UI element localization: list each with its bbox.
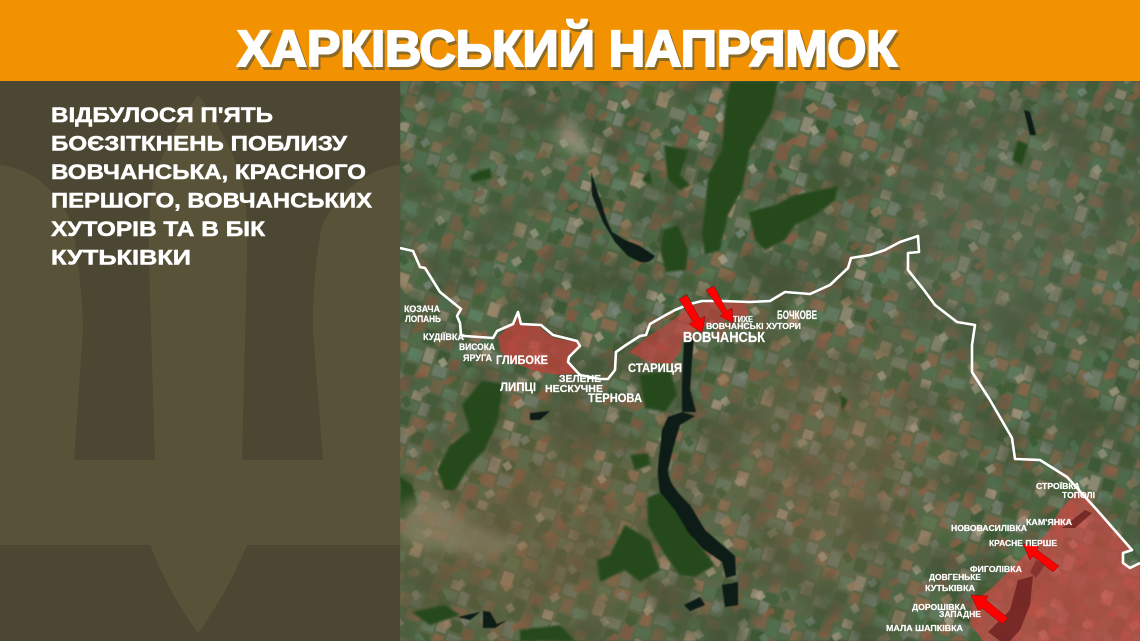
map labels: МАЛА ШАПКІВКА: [886, 623, 963, 633]
text block: summary: ВІДБУЛОСЯ П'ЯТЬ: [51, 103, 273, 127]
map labels: ЗЕЛЕНЕ: [559, 373, 601, 385]
map labels: ТЕРНОВА: [588, 393, 642, 405]
map labels: ЛОПАНЬ: [405, 314, 441, 324]
map labels: ВОВЧАНСЬКІ ХУТОРИ: [706, 321, 801, 331]
map labels: ТИХЕ: [733, 314, 753, 324]
map labels: [404, 304, 1095, 633]
forests: [400, 81, 1028, 641]
text block: summary: ВОВЧАНСЬКА, КРАСНОГО: [51, 160, 366, 184]
satellite map: [390, 81, 1140, 641]
map labels: КУДІЇВКА: [423, 332, 464, 342]
rivers and reservoirs: [458, 110, 1036, 628]
map labels: ЗАПАДНЕ: [939, 609, 981, 619]
tonal variation: [390, 100, 1120, 640]
map labels: ДОРОШІВКА: [912, 602, 966, 612]
text block: summary: ХУТОРІВ ТА В БІК: [51, 217, 266, 241]
occupied zone: south-east: [970, 490, 1140, 641]
icon: trident watermark: [0, 95, 400, 633]
occupied zone: Hlyboke: [498, 313, 580, 375]
map labels: ЛИПЦІ: [500, 382, 536, 394]
panel: left text panel with trident: [0, 81, 400, 641]
map labels: КРАСНЕ ПЕРШЕ: [989, 538, 1057, 548]
map labels: ТОПОЛІ: [1062, 490, 1095, 500]
title: ХАРКІВСЬКИЙ НАПРЯМОК: [237, 19, 898, 77]
arrow: Krasne Pershe: [1023, 544, 1059, 572]
text block: summary: КУТЬКІВКИ: [51, 246, 191, 270]
map labels: НЕСКУЧНЕ: [545, 383, 603, 395]
map labels: БОЧКОВЕ: [777, 310, 817, 322]
map labels: ДОВГЕНЬКЕ: [929, 572, 981, 582]
arrow: Vovchansk west: [679, 295, 705, 333]
map labels: ЯРУГА: [463, 353, 492, 363]
map labels: ГЛИБОКЕ: [496, 355, 548, 367]
map labels: СТРОЇВКА: [1036, 481, 1080, 491]
text block: summary: БОЄЗІТКНЕНЬ ПОБЛИЗУ: [51, 132, 348, 156]
map labels: ФИГОЛІВКА: [970, 564, 1022, 574]
map labels: КУТЬКІВКА: [925, 583, 975, 593]
occupied zone: Vovchansk: [630, 301, 750, 363]
map labels: СТАРИЦЯ: [628, 363, 682, 375]
text block: summary: ПЕРШОГО, ВОВЧАНСЬКИХ: [51, 188, 373, 212]
header banner: [0, 0, 1140, 81]
arrow: Kutkivka: [971, 595, 1008, 624]
map labels: ВИСОКА: [459, 342, 495, 352]
text block: summary: [51, 103, 373, 270]
map labels: ВОВЧАНСЬК: [683, 330, 765, 346]
map labels: КОЗАЧА: [404, 304, 440, 314]
map labels: КАМ'ЯНКА: [1026, 517, 1072, 527]
arrow: Vovchansk east: [706, 286, 733, 323]
city areas: [400, 122, 590, 560]
border line: [400, 236, 1140, 568]
map labels: НОВОВАСИЛІВКА: [951, 523, 1027, 533]
